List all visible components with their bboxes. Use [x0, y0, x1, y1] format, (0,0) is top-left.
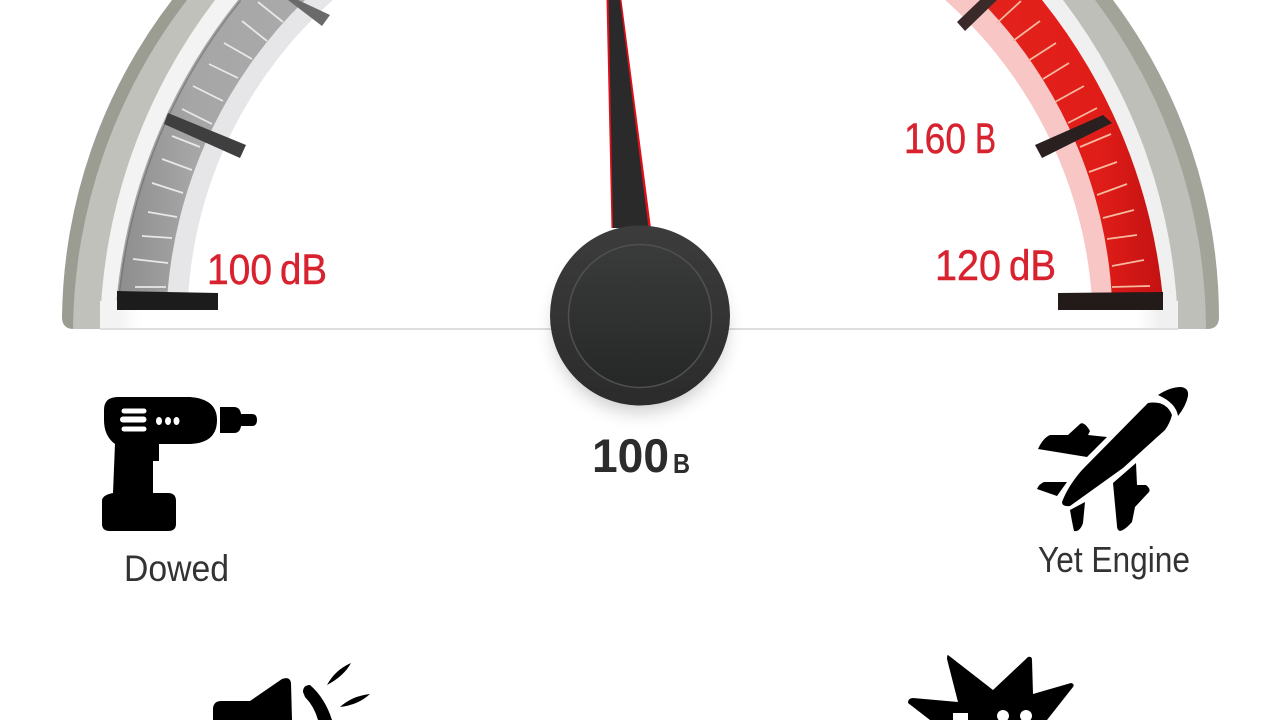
major tick top right — [957, 0, 997, 31]
centre readout: 100B: B — [673, 448, 690, 479]
major tick bottom left — [117, 291, 218, 310]
label: 120 dB: 120 — [935, 242, 1001, 290]
label: Dowed: Dowed — [124, 548, 229, 589]
label: 120 dB — [935, 242, 1056, 290]
major tick middle left — [164, 113, 246, 158]
hub — [550, 226, 730, 412]
scale ticks left — [133, 2, 283, 287]
baseline — [100, 328, 1178, 330]
major tick middle right — [1035, 115, 1112, 158]
icon: drill — [102, 397, 257, 531]
icon: jet plane — [1037, 387, 1188, 531]
centre readout: 100B: 100 — [592, 429, 669, 482]
label: 160 B: B — [975, 115, 996, 163]
icon: megaphone — [213, 663, 370, 720]
major tick top left — [288, 0, 330, 26]
label: 100 dB: dB — [280, 246, 327, 294]
major tick bottom right — [1058, 292, 1163, 310]
scale ticks right — [997, 1, 1150, 287]
label: 160 B: 160 — [904, 115, 966, 163]
gauge right arc: danger range — [700, 0, 1219, 329]
gauge left arc: quiet range — [62, 0, 700, 329]
needle — [606, 0, 651, 228]
label: 120 dB: dB — [1009, 242, 1056, 290]
label: 100 dB — [207, 246, 327, 294]
label: 100 dB: 100 — [207, 246, 272, 294]
icon: explosion — [908, 655, 1074, 720]
label: Yet Engine: Yet Engine — [1038, 539, 1190, 580]
